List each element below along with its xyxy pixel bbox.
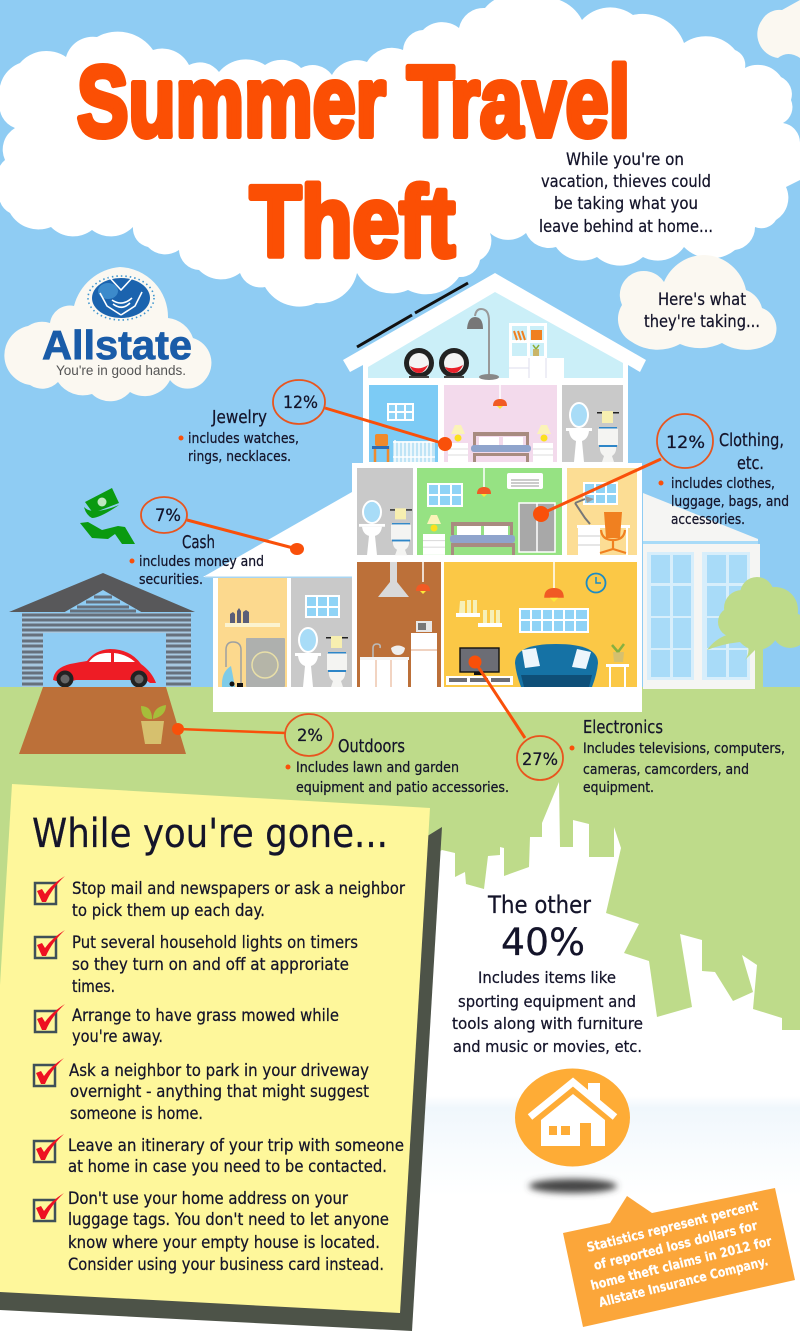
sky background — [0, 0, 800, 700]
right wing of house — [643, 493, 760, 689]
title: Theft — [250, 166, 455, 278]
callout: electronics: 27% — [522, 750, 558, 769]
house walls — [213, 378, 642, 712]
callout: cash: 7% — [155, 506, 181, 525]
callout: clothing: 12% — [666, 433, 705, 452]
garage — [9, 573, 195, 687]
checklist item: lights — [35, 930, 358, 996]
the other 40% text: Includes items like — [478, 968, 616, 987]
icon: orange house badge — [515, 1068, 630, 1193]
checklist item: mail: to pick them up each day. — [72, 901, 265, 920]
corner cloud top right — [757, 0, 800, 58]
callout: outdoors: Includes lawn and garden — [296, 760, 459, 776]
the other 40% text: and music or movies, etc. — [453, 1037, 642, 1056]
title: Summer Travel — [77, 46, 630, 158]
callout: outdoors: Outdoors — [338, 736, 405, 757]
callout: outdoors: equipment and patio accessories. — [296, 780, 509, 796]
callout: jewelry: includes watches, — [188, 431, 299, 447]
callout: outdoors: 2% — [297, 726, 323, 745]
checklist item: driveway — [34, 1058, 369, 1123]
callout: cash: includes money and — [139, 554, 264, 570]
Allstate logo cloud — [4, 267, 211, 401]
intro text: vacation, thieves could — [541, 172, 711, 191]
attic room — [404, 309, 564, 380]
checklist item: lights: so they turn on and off at approriate — [72, 955, 349, 974]
checklist item: lights: Put several household lights on timers — [72, 933, 358, 952]
intro text: leave behind at home... — [539, 217, 713, 236]
intro text: While you're on — [566, 150, 684, 169]
checklist item: grass — [35, 1004, 339, 1046]
the other 40% text — [452, 891, 643, 1056]
callout: jewelry: Jewelry — [211, 407, 267, 428]
panel: while you're gone — [0, 784, 442, 1331]
callout: jewelry: rings, necklaces. — [188, 449, 291, 465]
callout: electronics — [468, 656, 785, 796]
pale blue wash at bottom — [400, 1096, 800, 1196]
checklist item: luggage tags: Consider using your business card instead. — [68, 1255, 384, 1274]
title — [77, 46, 630, 278]
checklist item: driveway: overnight - anything that might suggest — [70, 1082, 369, 1101]
icon: cash in hand — [80, 488, 135, 544]
callout: clothing: accessories. — [671, 512, 745, 528]
callout: jewelry: 12% — [283, 393, 318, 412]
kitchen — [357, 562, 441, 687]
checklist item: grass: Arrange to have grass mowed while — [72, 1006, 339, 1025]
checklist item: luggage tags: Don't use your home address on your — [68, 1189, 348, 1208]
the other 40% text: sporting equipment and — [458, 992, 636, 1011]
callout: jewelry — [178, 380, 452, 465]
icon: potted plant — [141, 705, 166, 744]
callout: cash — [130, 497, 304, 588]
driveway — [19, 687, 186, 754]
Allstate logo cloud: You're in good hands. — [56, 363, 186, 378]
checklist item: luggage tags: luggage tags. You don't need to let anyone — [68, 1210, 389, 1229]
orange statistics note: of reported loss dollars for — [592, 1219, 759, 1274]
checklist item: driveway: Ask a neighbor to park in your driveway — [69, 1061, 369, 1080]
laundry room — [218, 578, 287, 687]
orange statistics note: Allstate Insurance Company. — [597, 1254, 770, 1311]
roof — [343, 273, 646, 380]
nursery — [369, 385, 438, 462]
checklist item: itinerary: at home in case you need to be contacted. — [68, 1157, 387, 1176]
callout: electronics: cameras, camcorders, and — [583, 762, 749, 778]
callout: cash: securities. — [139, 572, 203, 588]
intro text: be taking what you — [554, 194, 698, 213]
pink bedroom — [444, 385, 557, 462]
the other 40% text: 40% — [501, 921, 585, 964]
green bedroom — [417, 468, 562, 555]
the other 40% text: tools along with furniture — [452, 1014, 643, 1033]
living room — [444, 562, 637, 687]
orange statistics note: Statistics represent percent — [585, 1199, 760, 1256]
callout: clothing: Clothing, — [719, 430, 784, 451]
ground — [0, 687, 800, 1030]
checklist item: itinerary: Leave an itinerary of your trip with someone — [68, 1136, 404, 1155]
the other 40% text: The other — [487, 891, 591, 919]
heading: While you're gone... — [32, 811, 388, 857]
checklist item: grass: you're away. — [72, 1027, 163, 1046]
upstairs bathroom — [562, 385, 623, 462]
callout: electronics: equipment. — [583, 780, 654, 796]
cloud: here's what they're taking — [618, 255, 776, 350]
orange statistics note: home theft claims in 2012 for — [589, 1234, 774, 1294]
callout: clothing: includes clothes, — [671, 476, 775, 492]
checklist item: luggage tags — [34, 1189, 389, 1274]
cloud: here's what they're taking: they're taking... — [644, 312, 760, 331]
orange statistics note — [563, 1188, 795, 1327]
checklist item: driveway: someone is home. — [70, 1104, 203, 1123]
icon: Allstate hands — [88, 276, 154, 320]
callout: clothing — [533, 414, 789, 528]
Allstate logo cloud: Allstate — [42, 322, 192, 368]
white city skyline silhouette — [0, 782, 800, 1336]
house — [203, 273, 646, 712]
cloud: here's what they're taking: Here's what — [658, 290, 746, 309]
mid floor bathroom — [357, 468, 413, 555]
checklist item: mail — [35, 876, 405, 920]
tree — [707, 577, 800, 690]
study room — [567, 468, 637, 555]
icon: red car — [53, 649, 156, 688]
laundry bathroom — [291, 578, 352, 687]
intro text — [539, 150, 713, 236]
callout: cash: Cash — [182, 532, 215, 553]
checklist item: mail: Stop mail and newspapers or ask a neighbor — [72, 879, 405, 898]
checklist item: lights: times. — [72, 977, 115, 996]
checklist item: itinerary — [34, 1134, 404, 1176]
left wing roof — [203, 492, 352, 577]
checklist item: luggage tags: know where your empty house is located. — [68, 1233, 380, 1252]
callout: outdoors — [172, 714, 509, 796]
callout: electronics: Electronics — [583, 717, 663, 738]
callout: clothing: etc. — [737, 453, 764, 474]
main title cloud — [0, 0, 800, 307]
